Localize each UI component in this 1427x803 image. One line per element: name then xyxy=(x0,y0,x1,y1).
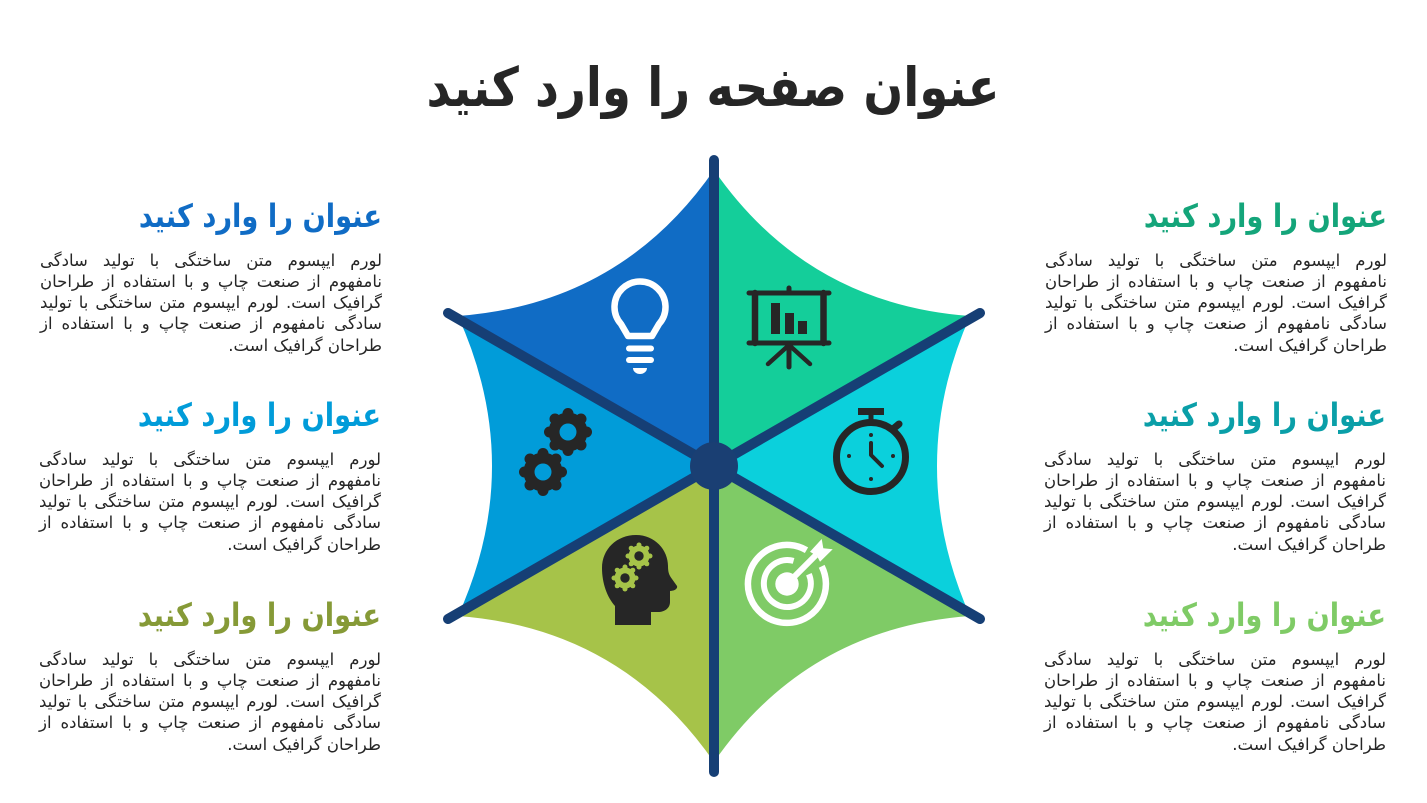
title: عنوان صفحه را وارد کنید xyxy=(426,56,1000,119)
text block: middle right xyxy=(1043,396,1386,554)
body text: سادگی نامفهوم از صنعت چاپ و با استفاده از xyxy=(39,713,381,732)
body text: گرافیک است. لورم ایپسوم متن ساختگی با تولید xyxy=(1044,492,1386,511)
body text: لورم ایپسوم متن ساختگی با تولید سادگی xyxy=(39,450,381,468)
body text: سادگی نامفهوم از صنعت چاپ و با استفاده از xyxy=(1044,513,1386,532)
body text: طراحان گرافیک است. xyxy=(1232,735,1386,754)
body text: سادگی نامفهوم از صنعت چاپ و با استفاده از xyxy=(39,513,381,532)
body text: گرافیک است. لورم ایپسوم متن ساختگی با تولید xyxy=(39,492,381,511)
body text: نامفهوم از صنعت چاپ و با استفاده از طراحان xyxy=(1044,471,1386,490)
body text: لورم ایپسوم متن ساختگی با تولید سادگی xyxy=(1045,250,1387,270)
body text xyxy=(1044,250,1387,355)
text block: bottom right xyxy=(1043,596,1386,754)
body text: نامفهوم از صنعت چاپ و با استفاده از طراحان xyxy=(40,272,382,291)
text block: top right xyxy=(1044,197,1387,355)
body text: طراحان گرافیک است. xyxy=(1233,336,1387,355)
heading: عنوان را وارد کنید xyxy=(1143,396,1386,434)
body text xyxy=(38,450,381,554)
body text: نامفهوم از صنعت چاپ و با استفاده از طراحان xyxy=(1044,671,1386,690)
body text: نامفهوم از صنعت چاپ و با استفاده از طراحان xyxy=(39,471,381,490)
body text: لورم ایپسوم متن ساختگی با تولید سادگی xyxy=(40,250,382,270)
body text: لورم ایپسوم متن ساختگی با تولید سادگی xyxy=(1044,650,1386,668)
body text: طراحان گرافیک است. xyxy=(228,336,382,355)
text block: middle left xyxy=(38,396,381,554)
body text: سادگی نامفهوم از صنعت چاپ و با استفاده از xyxy=(40,314,382,333)
segment: top-right green xyxy=(714,170,970,466)
spokes xyxy=(448,160,980,772)
icon: presentation board xyxy=(749,288,829,367)
body text xyxy=(39,250,382,355)
body text: سادگی نامفهوم از صنعت چاپ و با استفاده از xyxy=(1045,314,1387,333)
body text: گرافیک است. لورم ایپسوم متن ساختگی با تولید xyxy=(1044,692,1386,711)
heading: عنوان را وارد کنید xyxy=(1143,596,1386,634)
heading: عنوان را وارد کنید xyxy=(138,396,381,434)
segment: middle-left sky blue xyxy=(458,316,714,616)
center hub xyxy=(690,442,738,490)
text block: top left xyxy=(39,197,382,355)
body text: طراحان گرافیک است. xyxy=(1232,535,1386,554)
body text: سادگی نامفهوم از صنعت چاپ و با استفاده از xyxy=(1044,713,1386,732)
body text: گرافیک است. لورم ایپسوم متن ساختگی با تولید xyxy=(40,293,382,312)
icon: target with arrow xyxy=(748,539,833,623)
body text xyxy=(1043,650,1386,754)
icon: light bulb xyxy=(615,281,666,374)
icon: stopwatch xyxy=(836,408,906,492)
body text: طراحان گرافیک است. xyxy=(227,535,381,554)
body text: لورم ایپسوم متن ساختگی با تولید سادگی xyxy=(39,650,381,668)
body text: گرافیک است. لورم ایپسوم متن ساختگی با تولید xyxy=(1045,293,1387,312)
segment: top-left blue xyxy=(458,170,714,466)
body text xyxy=(38,650,381,754)
heading: عنوان را وارد کنید xyxy=(1144,197,1387,235)
body text: نامفهوم از صنعت چاپ و با استفاده از طراحان xyxy=(39,671,381,690)
segment: bottom-right light green xyxy=(714,466,970,762)
segment: bottom-left olive xyxy=(458,466,714,762)
text block: bottom left xyxy=(38,596,381,754)
body text: لورم ایپسوم متن ساختگی با تولید سادگی xyxy=(1044,450,1386,468)
heading: عنوان را وارد کنید xyxy=(139,197,382,235)
icon: gears xyxy=(524,412,588,492)
icon: head with gears xyxy=(602,535,677,625)
body text xyxy=(1043,450,1386,554)
body text: نامفهوم از صنعت چاپ و با استفاده از طراحان xyxy=(1045,272,1387,291)
body text: گرافیک است. لورم ایپسوم متن ساختگی با تولید xyxy=(39,692,381,711)
body text: طراحان گرافیک است. xyxy=(227,735,381,754)
segment: middle-right cyan xyxy=(714,316,970,616)
heading: عنوان را وارد کنید xyxy=(138,596,381,634)
